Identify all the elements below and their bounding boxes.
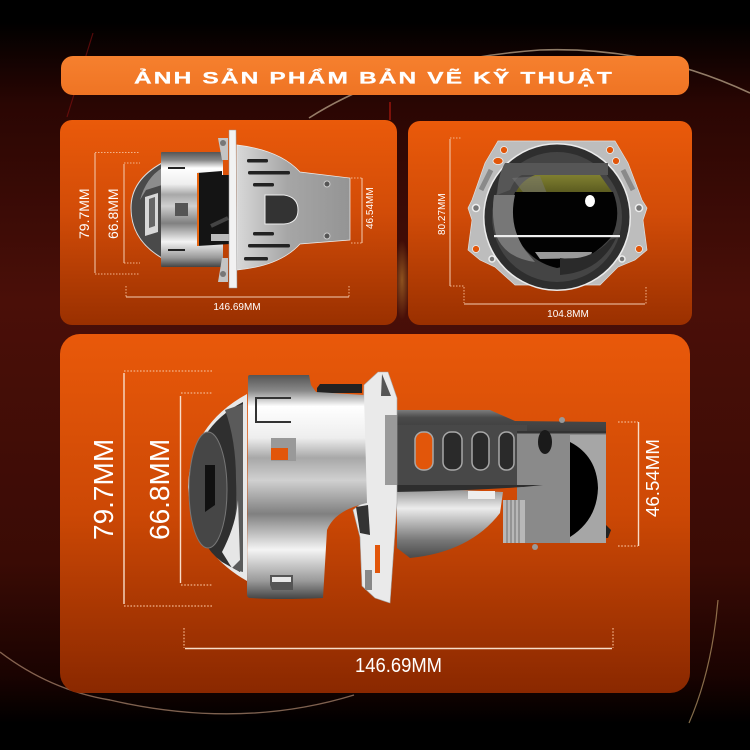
dimension: 66.8MM (105, 163, 140, 263)
dimension: 46.54MM (351, 178, 376, 243)
panel: side view dimensions (60, 120, 397, 325)
lamp enlarged side view (188, 372, 611, 603)
rear body (395, 410, 611, 558)
title text: ẢNH SẢN PHẨM BẢN VẼ KỸ THUẬT (134, 68, 614, 88)
title banner (61, 56, 689, 95)
dimension: 79.7MM (76, 152, 140, 274)
lamp side view (131, 130, 350, 288)
dimension: 79.7MM large: 79.7MM (88, 439, 119, 540)
dimension: 146.69MM large (184, 628, 613, 677)
panel: front view dimensions (408, 121, 692, 325)
dimension: 46.54MM large: 46.54MM (642, 439, 663, 517)
dimension: 66.8MM large (144, 393, 212, 585)
panel: enlarged side view (60, 334, 690, 693)
dimension: 80.27MM (437, 138, 464, 303)
dimension: 46.54MM large (618, 422, 663, 546)
dimension: 79.7MM: 79.7MM (76, 188, 92, 239)
dimension: 46.54MM: 46.54MM (365, 187, 376, 229)
dimension: 146.69MM large: 146.69MM (355, 655, 442, 677)
mounting flange (317, 372, 397, 603)
lamp front view (468, 141, 647, 291)
dimension: 146.69MM: 146.69MM (213, 302, 261, 313)
dimension: 66.8MM large: 66.8MM (144, 439, 175, 540)
silver housing (247, 375, 367, 599)
dimension: 104.8MM: 104.8MM (547, 309, 589, 320)
dimension: 80.27MM: 80.27MM (437, 193, 448, 235)
dimension: 79.7MM large (88, 371, 212, 606)
dimension: 66.8MM: 66.8MM (105, 188, 121, 239)
dimension: 146.69MM (126, 286, 349, 313)
lens dome (188, 394, 247, 581)
